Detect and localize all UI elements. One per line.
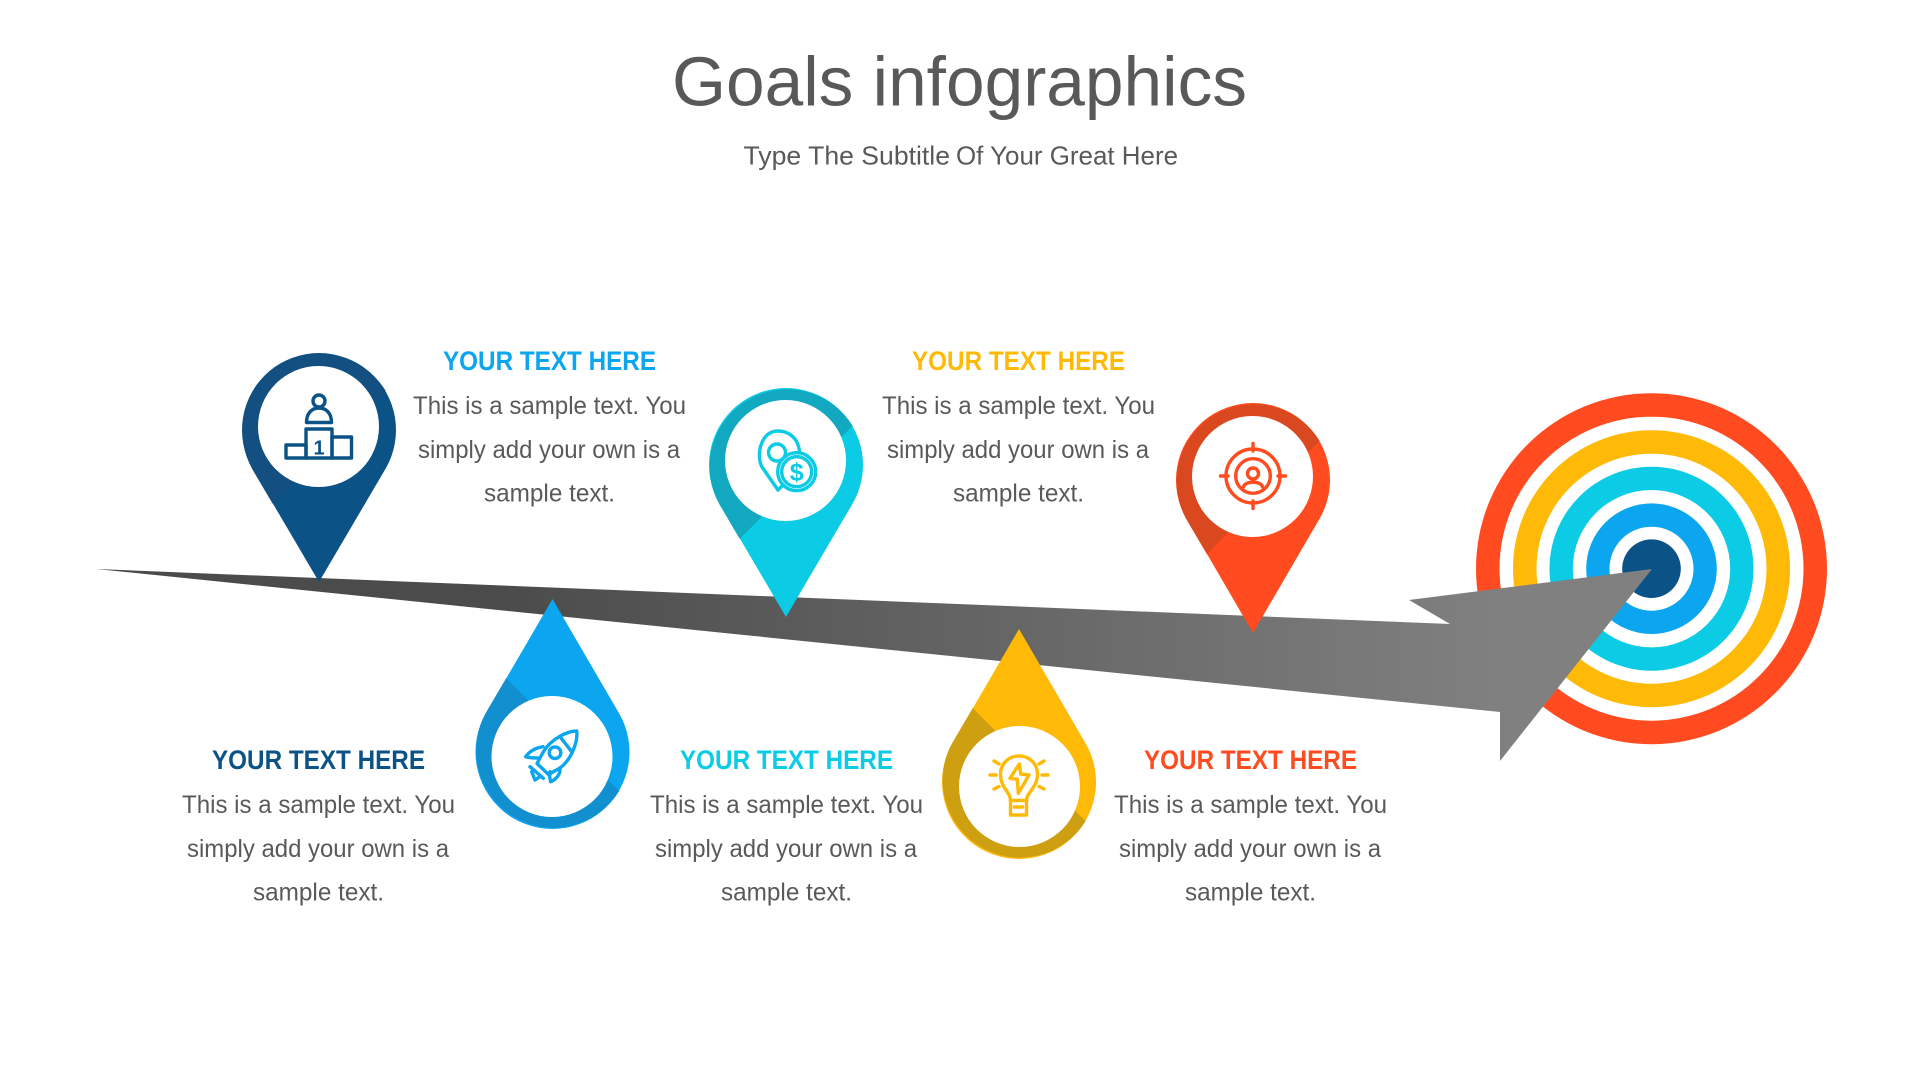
heading: YOUR TEXT HERE <box>1144 745 1357 775</box>
body text: simply add your own is a <box>418 436 680 464</box>
text block: bottom centre <box>650 745 923 906</box>
icon: rocket <box>526 731 577 782</box>
subtitle <box>744 140 1178 170</box>
body text: sample text. <box>953 480 1084 508</box>
body text: This is a sample text. You <box>650 791 923 819</box>
heading: YOUR TEXT HERE <box>212 745 425 775</box>
body text: This is a sample text. You <box>882 392 1155 420</box>
pin 2: location and dollar, teal <box>709 388 863 617</box>
body text <box>413 392 686 508</box>
text block: bottom left <box>182 745 455 906</box>
icon: crosshair with person <box>1220 444 1286 508</box>
subtitle: Of Your Great Here <box>956 140 1178 170</box>
body text: This is a sample text. You <box>182 791 455 819</box>
icon: location pin with coin: $ <box>790 458 804 486</box>
target: concentric rings <box>1476 393 1827 744</box>
text block: top left <box>413 346 686 508</box>
body text: This is a sample text. You <box>1114 791 1387 819</box>
body text: simply add your own is a <box>1119 835 1381 863</box>
body text: This is a sample text. You <box>413 392 686 420</box>
arrow <box>96 569 1652 761</box>
body text <box>650 791 923 906</box>
body text: sample text. <box>253 878 384 906</box>
body text: simply add your own is a <box>655 835 917 863</box>
title: Goals infographics <box>672 42 1247 120</box>
heading: YOUR TEXT HERE <box>912 346 1125 376</box>
heading: YOUR TEXT HERE <box>680 745 893 775</box>
drop 1: rocket, blue <box>476 599 630 829</box>
body text <box>1114 791 1387 906</box>
heading: YOUR TEXT HERE <box>443 346 656 376</box>
subtitle: Type The Subtitle <box>744 140 950 170</box>
icon: podium: 1 <box>313 438 325 460</box>
body text: simply add your own is a <box>187 835 449 863</box>
drop 2: light bulb, yellow <box>942 629 1096 859</box>
body text: sample text. <box>484 480 615 508</box>
text block: bottom right <box>1114 745 1387 906</box>
icon: location pin with coin <box>759 431 816 491</box>
body text <box>882 392 1155 508</box>
pin 1: podium, navy <box>242 353 396 582</box>
icon: podium <box>286 395 352 460</box>
body text: sample text. <box>1185 878 1316 906</box>
pin 3: target person, orange <box>1176 403 1330 633</box>
text block: top right <box>882 346 1155 508</box>
body text <box>182 791 455 906</box>
icon: light bulb <box>990 756 1048 815</box>
body text: sample text. <box>721 878 852 906</box>
body text: simply add your own is a <box>887 436 1149 464</box>
